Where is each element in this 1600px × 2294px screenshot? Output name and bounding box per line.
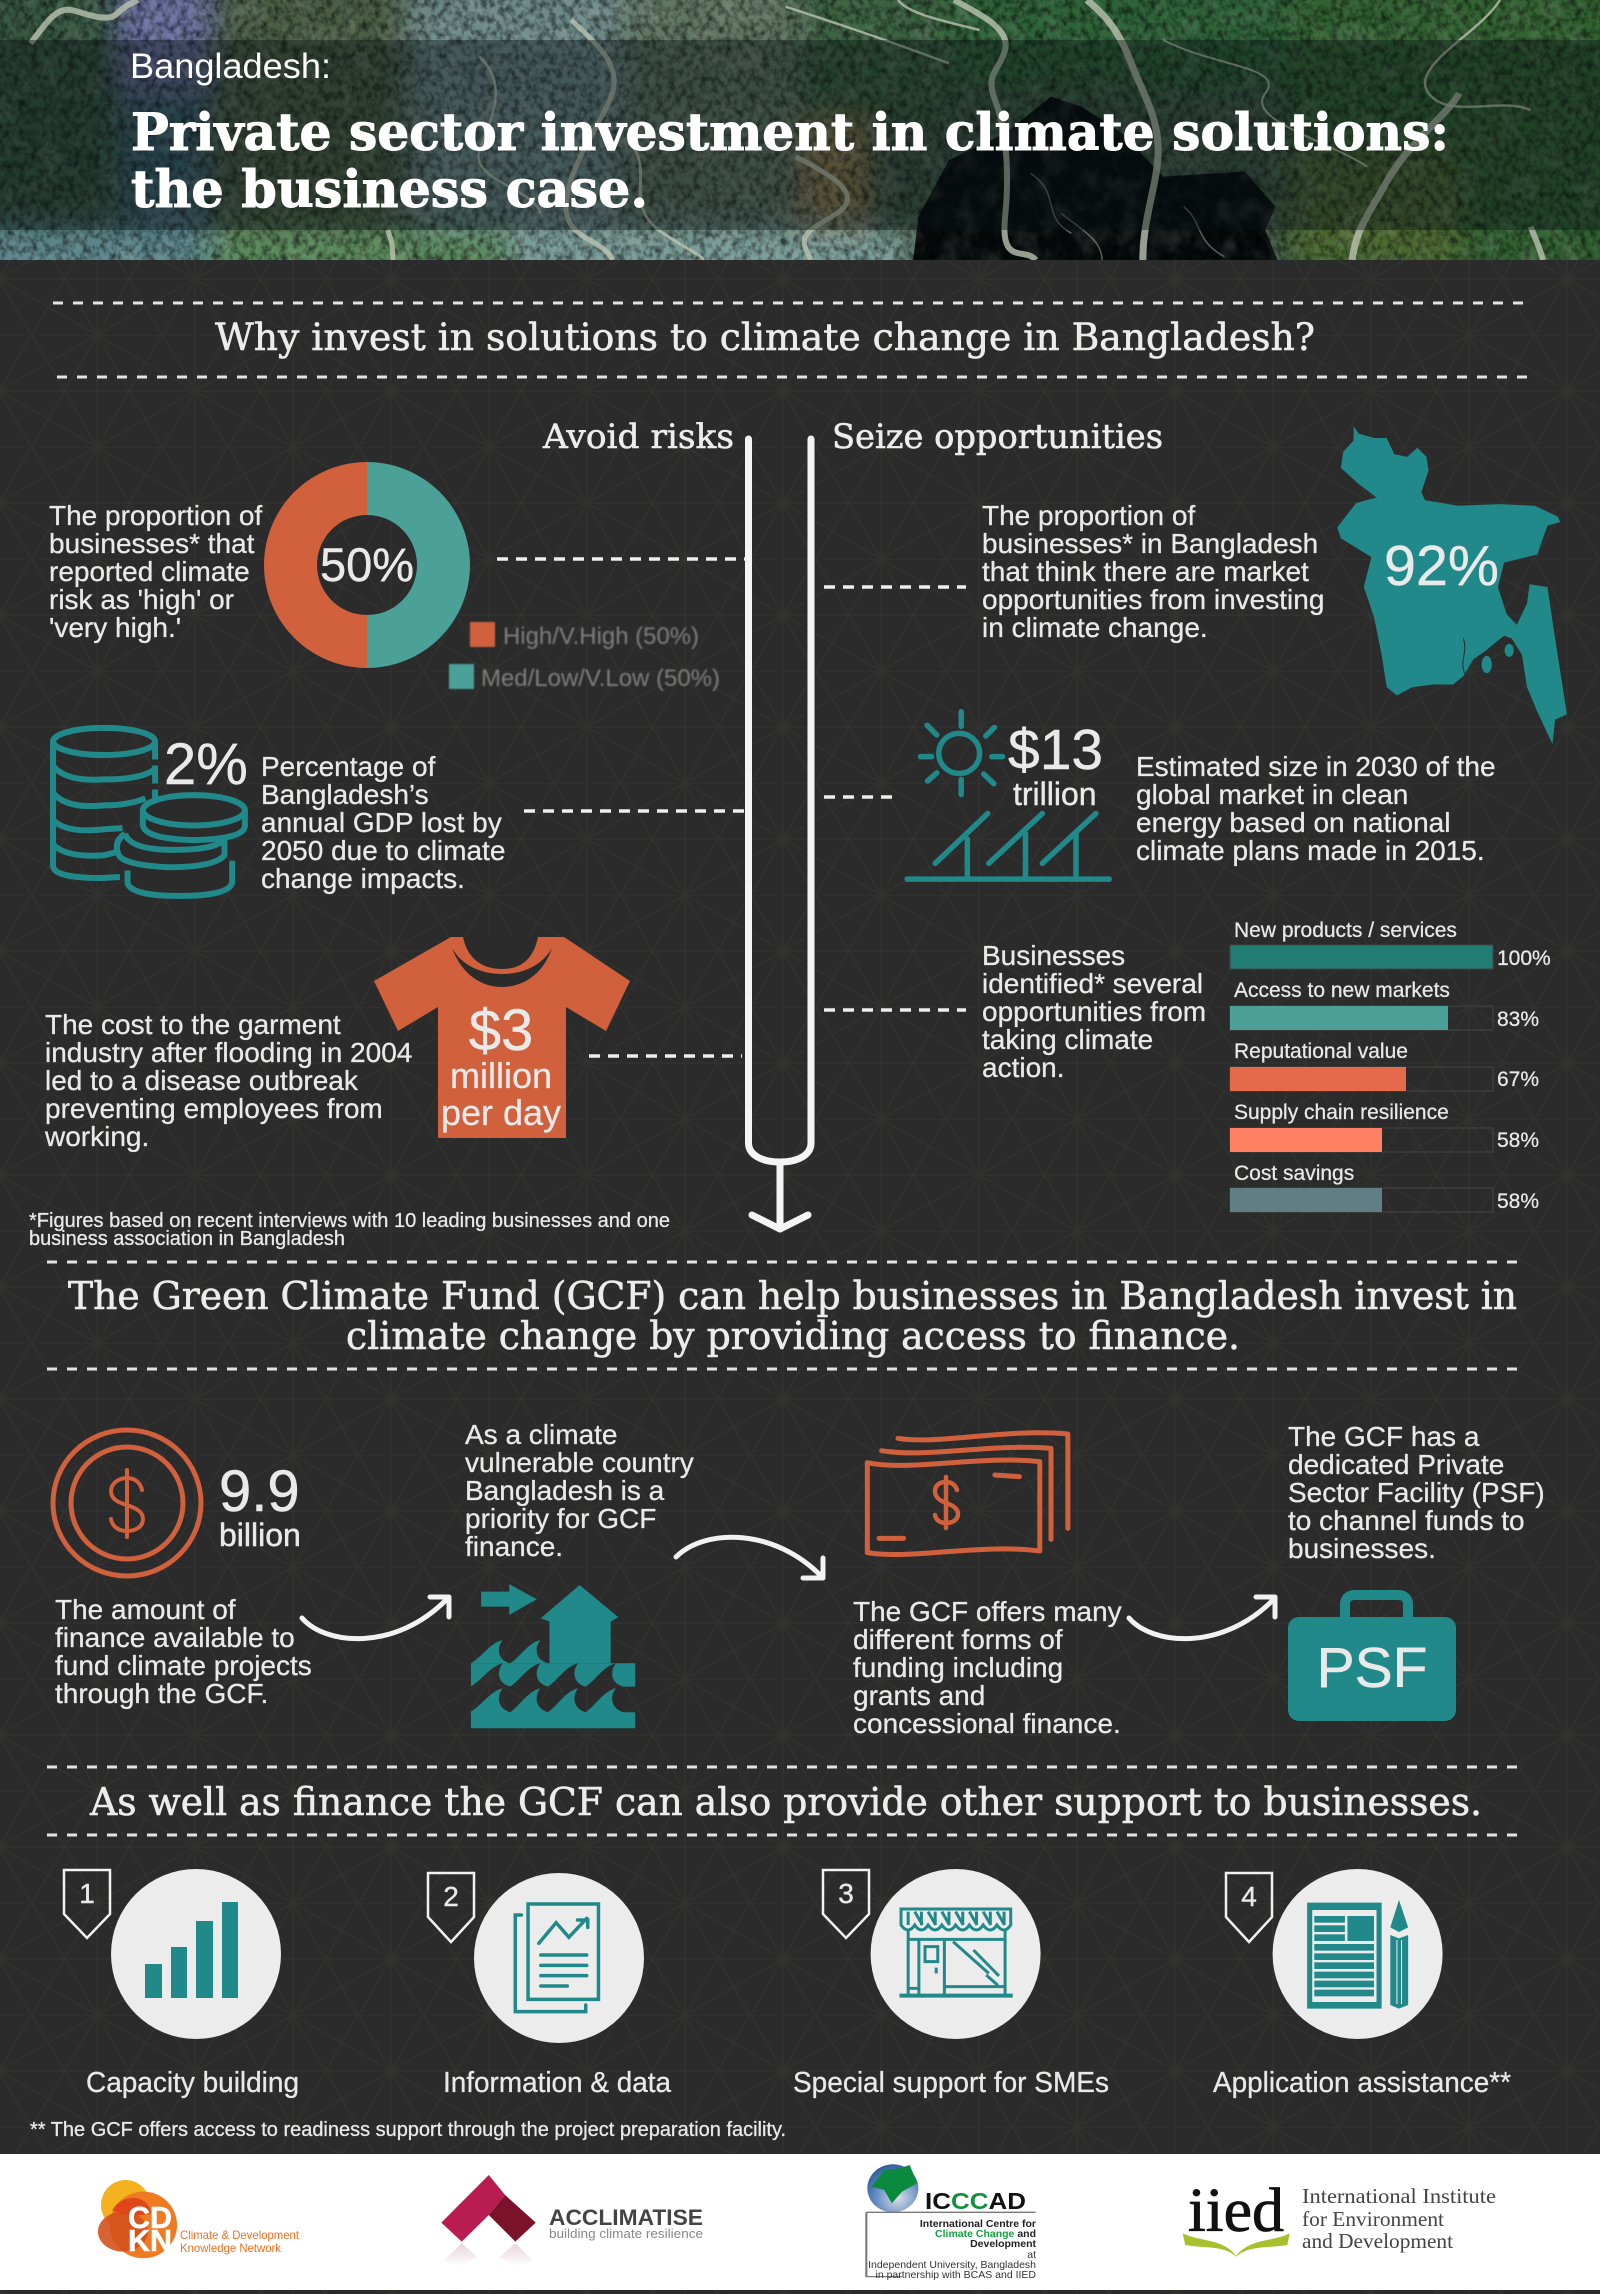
support 4: application assistance: Application assistance** (1213, 2067, 1511, 2099)
logo: IIED: International Institute (1302, 2184, 1496, 2208)
text: proportion reporting climate risk: businesses* that (49, 528, 255, 559)
bar: access to new markets 83%: Access to new markets (1234, 979, 1450, 1002)
text: private sector facility: to channel funds to (1288, 1505, 1525, 1536)
bar: new products / services 100%: 100% (1497, 947, 1551, 970)
bar: cost savings 58%: Cost savings (1234, 1162, 1354, 1185)
text: garment industry cost: working. (44, 1121, 149, 1152)
donut legend: Med/Low/V.Low (50%) (481, 665, 720, 692)
satellite black delta region (913, 97, 1278, 260)
logo: Acclimatise (441, 2175, 703, 2267)
support 1: capacity building: Capacity building (86, 2067, 299, 2099)
bar: reputational value 67%: Reputational value (1234, 1040, 1408, 1063)
icon: banknotes (867, 1433, 1068, 1555)
column heading: avoid risks: Avoid risks (542, 417, 734, 457)
support 3: special support for SMEs: Special support for SMEs (793, 2067, 1109, 2099)
logo: ICCCAD: International Centre for (920, 2218, 1036, 2230)
text: forms of funding: grants and (853, 1680, 985, 1711)
badge 3 (823, 1870, 869, 1938)
bar: reputational value 67%: 67% (1497, 1068, 1539, 1091)
badge 3: 3 (838, 1878, 854, 1909)
text: garment industry cost: preventing employees from (45, 1093, 383, 1124)
footnote: readiness support: ** The GCF offers access to readiness support through the project preparation facility. (30, 2119, 786, 2141)
text: garment industry cost: The cost to the garment (45, 1009, 341, 1040)
logo: ICCCAD: in partnership with BCAS and IIED (876, 2269, 1036, 2281)
bar: supply chain resilience 58%: 58% (1497, 1129, 1539, 1152)
text: market opportunities: opportunities from investing (982, 584, 1324, 615)
stat: $13 trillion: $13 (1008, 718, 1103, 782)
icon: shop front (899, 1909, 1013, 1996)
text: clean energy market: Estimated size in 2030 of the (1136, 751, 1496, 782)
logo: IIED: for Environment (1302, 2207, 1444, 2231)
map of Bangladesh with 92% (1337, 426, 1567, 744)
icon: flooded house (471, 1584, 635, 1728)
text: forms of funding: different forms of (853, 1624, 1063, 1655)
text: market opportunities: The proportion of (982, 500, 1195, 531)
text: finance available: finance available to (55, 1622, 295, 1653)
logo: CDKN: Climate & Development (180, 2228, 300, 2242)
text: private sector facility: dedicated Private (1288, 1449, 1504, 1480)
support 2: information and data: Information & data (443, 2067, 672, 2099)
logo: IIED: iied (1188, 2177, 1284, 2245)
icon: report document (515, 1904, 598, 2012)
icon: PSF briefcase (1288, 1595, 1456, 1721)
header title block: the business case. (131, 160, 648, 220)
central funnel tube with down arrow (748, 439, 811, 1229)
text: climate vulnerable country: priority for GCF (465, 1503, 656, 1534)
logo: CDKN: KN (128, 2223, 172, 2258)
header title block (130, 47, 1449, 220)
text: climate vulnerable country: As a climate (465, 1419, 618, 1450)
text: GDP lost: annual GDP lost by (261, 807, 502, 838)
text: opportunities identified: action. (982, 1052, 1064, 1083)
footnote: interviews: business association in Bangladesh (29, 1228, 345, 1250)
logo: CDKN: CD (128, 2200, 172, 2235)
text: opportunities identified: identified* several (982, 968, 1203, 999)
icon: t-shirt with $3 million per day: per day (441, 1092, 561, 1133)
donut legend (449, 622, 720, 692)
stat: 9.9 billion: 9.9 (219, 1459, 300, 1524)
heading: other support: As well as finance the GCF can also provide other support to businesses. (89, 1780, 1482, 1824)
text: private sector facility: Sector Facility (PSF) (1288, 1477, 1545, 1508)
stat: $13 trillion (1008, 718, 1103, 812)
bar: cost savings 58% (1230, 1162, 1539, 1213)
heading: why invest: Why invest in solutions to climate change in Bangladesh? (215, 316, 1315, 359)
arrow: offers to PSF (1129, 1597, 1275, 1639)
logo: CDKN: Knowledge Network (180, 2241, 282, 2255)
logo: Acclimatise: building climate resilience (549, 2226, 703, 2241)
support 1: capacity building (64, 1869, 299, 2099)
icon: sun and solar panels (907, 712, 1109, 879)
bar: new products / services 100% (1230, 919, 1551, 970)
satellite rivers (31, 0, 1543, 260)
icon: dollar coin (53, 1430, 201, 1576)
support 4: application assistance (1213, 1869, 1511, 2099)
icon: t-shirt with $3 million per day: $3 (469, 998, 533, 1063)
bar: cost savings 58%: 58% (1497, 1190, 1539, 1213)
logo: ICCCAD (866, 2164, 1036, 2281)
badge 4: 4 (1241, 1881, 1257, 1912)
donut chart 50% (264, 462, 470, 668)
stat: $13 trillion: trillion (1013, 776, 1097, 812)
text: GDP lost: Percentage of (261, 751, 436, 782)
heading: green climate fund: The Green Climate Fund (GCF) can help businesses in Bangladesh invest in (68, 1274, 1517, 1318)
header: satellite image banner (0, 0, 1600, 260)
column heading: seize opportunities: Seize opportunities (832, 417, 1163, 457)
logo: ICCCAD: Climate Change and (935, 2228, 1036, 2240)
text: climate vulnerable country: vulnerable country (465, 1447, 694, 1478)
icon: banknote dollar sign (935, 1477, 958, 1528)
icon: t-shirt with $3 million per day (374, 937, 630, 1138)
text: GDP lost: change impacts. (261, 863, 465, 894)
donut chart 50%: 50% (320, 538, 414, 591)
bar: supply chain resilience 58%: Supply chain resilience (1234, 1101, 1449, 1124)
map of Bangladesh with 92%: 92% (1384, 534, 1499, 598)
text: proportion reporting climate risk: reported climate (49, 556, 250, 587)
text: forms of funding: funding including (853, 1652, 1063, 1683)
footer logo strip (0, 2154, 1600, 2290)
logo: ICCCAD: Development (970, 2238, 1036, 2250)
icon: rising bars (145, 1902, 238, 1998)
text: opportunities identified: Businesses (982, 940, 1125, 971)
arrow: finance to priority (302, 1597, 449, 1639)
icon: PSF briefcase: PSF (1317, 1636, 1427, 1700)
badge 1 (64, 1870, 110, 1938)
bar chart: opportunities (1230, 919, 1551, 1213)
text: forms of funding: concessional finance. (853, 1708, 1121, 1739)
donut legend: High/V.High (50%) (503, 623, 699, 650)
text: market opportunities: in climate change. (982, 612, 1208, 643)
stat: 9.9 billion (219, 1459, 301, 1553)
translucent title band (0, 40, 1600, 230)
support 3: special support for SMEs (793, 1869, 1109, 2099)
text: proportion reporting climate risk: The proportion of (49, 500, 262, 531)
heading: green climate fund: climate change by providing access to finance. (346, 1314, 1240, 1358)
support 2: information and data (428, 1873, 672, 2099)
bar: reputational value 67% (1230, 1040, 1539, 1091)
icon: form and pencil (1307, 1900, 1408, 2009)
text: garment industry cost: industry after flooding in 2004 (45, 1037, 412, 1068)
logo: ICCCAD: at (1027, 2249, 1036, 2261)
bar: access to new markets 83%: 83% (1497, 1008, 1539, 1031)
text: opportunities identified: opportunities from (982, 996, 1206, 1027)
text: clean energy market: energy based on national (1136, 807, 1450, 838)
text: market opportunities: that think there are market (982, 556, 1309, 587)
badge 2 (428, 1873, 474, 1942)
text: finance available: fund climate projects (55, 1650, 312, 1681)
text: proportion reporting climate risk: risk as 'high' or (49, 584, 234, 615)
text: proportion reporting climate risk: 'very high.' (49, 612, 181, 643)
logo: IIED (1183, 2177, 1496, 2257)
text: GDP lost: 2050 due to climate (261, 835, 505, 866)
text: climate vulnerable country: finance. (465, 1531, 563, 1562)
text: clean energy market: climate plans made in 2015. (1136, 835, 1485, 866)
text: private sector facility: businesses. (1288, 1533, 1436, 1564)
logo: Acclimatise: ACCLIMATISE (549, 2205, 703, 2230)
text: clean energy market: global market in clean (1136, 779, 1408, 810)
text: garment industry cost: led to a disease outbreak (45, 1065, 359, 1096)
dashed connectors (497, 559, 966, 1056)
footnote: interviews: *Figures based on recent interviews with 10 leading businesses and one (29, 1210, 670, 1232)
icon: stacked coins (53, 728, 245, 896)
stat: 9.9 billion: billion (219, 1517, 301, 1553)
bar: new products / services 100%: New products / services (1234, 919, 1457, 942)
text: finance available: through the GCF. (55, 1678, 268, 1709)
badge 1: 1 (79, 1878, 95, 1909)
stat: 2%: 2% (164, 732, 248, 797)
text: opportunities identified: taking climate (982, 1024, 1153, 1055)
header title block: Private sector investment in climate solutions: (131, 103, 1449, 163)
arrow: priority to offers (676, 1537, 823, 1578)
text: forms of funding: The GCF offers many (853, 1596, 1122, 1627)
bar: access to new markets 83% (1230, 979, 1539, 1031)
logo: ICCCAD: ICCCAD (925, 2188, 1026, 2214)
bar: supply chain resilience 58% (1230, 1101, 1539, 1152)
logo: IIED: and Development (1302, 2229, 1453, 2253)
text: private sector facility: The GCF has a (1288, 1421, 1480, 1452)
header title block: Bangladesh: (130, 47, 331, 86)
logo: CDKN (98, 2180, 300, 2258)
text: finance available: The amount of (55, 1594, 236, 1625)
text: climate vulnerable country: Bangladesh is a (465, 1475, 665, 1506)
logo: ICCCAD: Independent University, Bangladesh (868, 2259, 1036, 2271)
text: market opportunities: businesses* in Bangladesh (982, 528, 1318, 559)
text: GDP lost: Bangladesh’s (261, 779, 429, 810)
heading: green climate fund (47, 1262, 1517, 1369)
footnote: interviews (29, 1210, 670, 1250)
badge 4 (1226, 1873, 1272, 1942)
icon: t-shirt with $3 million per day: million (450, 1055, 552, 1096)
badge 2: 2 (443, 1881, 459, 1912)
